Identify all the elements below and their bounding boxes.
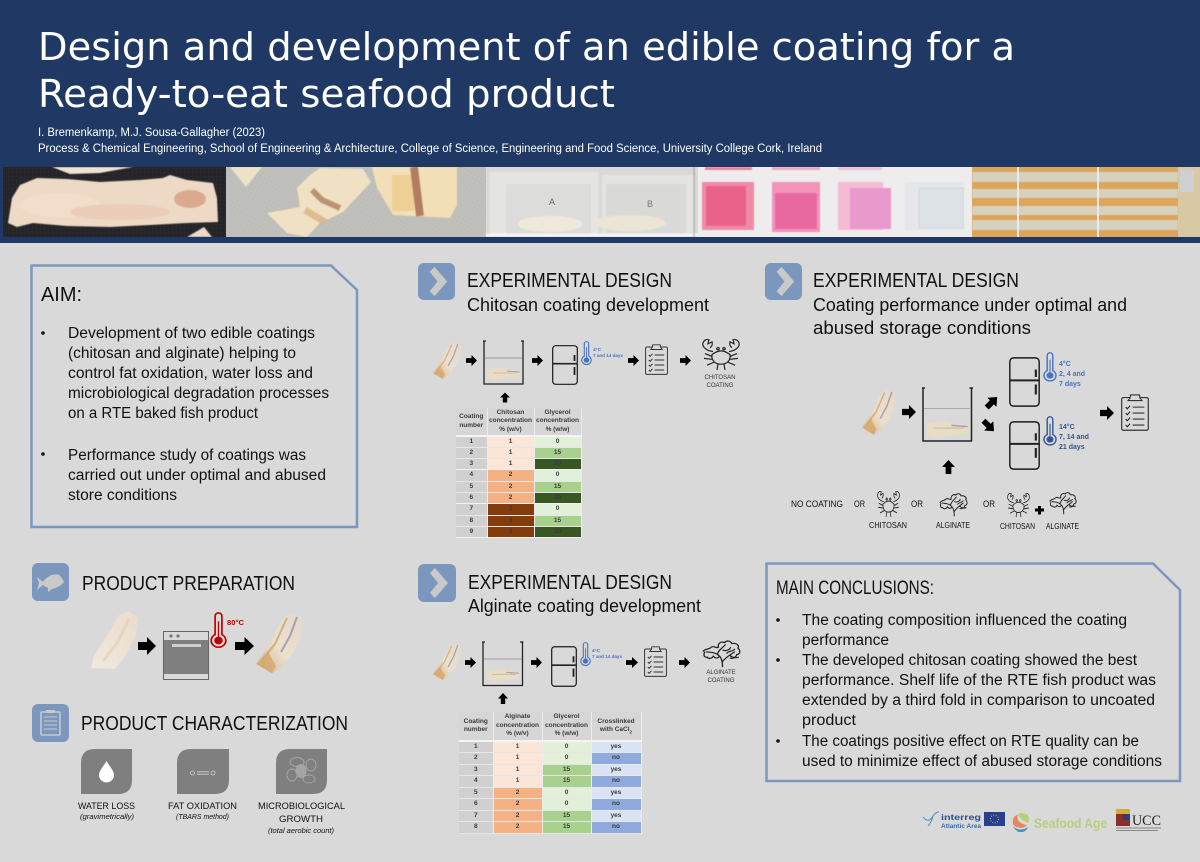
table: chitosan coating formulations: Chitosan xyxy=(497,409,524,416)
table: chitosan coating formulations: 30 xyxy=(554,460,561,467)
label: 80 degrees: 80°C xyxy=(227,618,245,627)
tile: microbiological growth: MICROBIOLOGICAL xyxy=(258,801,345,812)
image: baked fillet xyxy=(256,613,303,674)
table: alginate coating formulations: 0 xyxy=(565,800,568,807)
text: conclusions bullets xyxy=(776,612,1162,770)
logo: UCC xyxy=(1116,809,1161,830)
table: alginate coating formulations: Crosslinked xyxy=(597,718,635,725)
text: aim bullets: Development of two edible coatings xyxy=(68,325,315,342)
table: chitosan coating formulations: 7 xyxy=(469,505,473,512)
table: alginate coating formulations: 1 xyxy=(516,766,519,773)
panel: alginate coating development xyxy=(418,564,740,704)
process flow: storage: 4°C xyxy=(1059,360,1071,368)
coating options row: OR xyxy=(983,499,995,509)
photo: packaged samples xyxy=(972,167,1200,237)
text: conclusions bullets: performance xyxy=(802,632,889,649)
tile: water loss: WATER LOSS xyxy=(78,801,135,812)
table: alginate coating formulations: no xyxy=(612,777,620,784)
table: chitosan coating formulations: 15 xyxy=(554,517,561,524)
title: Ready-to-eat seafood product xyxy=(38,72,615,116)
table: chitosan coating formulations: concentration xyxy=(489,417,532,424)
text: aim bullets: (chitosan and alginate) helping to xyxy=(68,345,296,362)
text: conclusions bullets: The coatings positive effect on RTE quality can be xyxy=(802,733,1139,750)
table: chitosan coating formulations: 30 xyxy=(554,528,561,535)
table: alginate coating formulations: 2 xyxy=(516,800,519,807)
logo: Seafood Age: Seafood Age xyxy=(1034,815,1107,831)
authors and affiliation: I. Bremenkamp, M.J. Sousa-Gallagher (2023) xyxy=(38,127,265,139)
table: chitosan coating formulations: 3 xyxy=(509,505,512,512)
coating options row: CHITOSAN xyxy=(1000,522,1035,531)
table: alginate coating formulations: 15 xyxy=(563,812,570,819)
table: alginate coating formulations: 15 xyxy=(563,766,570,773)
process flow: chitosan: 7 and 14 days xyxy=(593,353,623,359)
text: conclusions bullets: performance. Shelf life of the RTE fish product was xyxy=(802,672,1156,689)
coating options row: NO COATING xyxy=(791,499,843,509)
heading: chitosan design: Chitosan coating development xyxy=(467,295,709,315)
photo: pink films xyxy=(698,167,972,237)
table: alginate coating formulations: % (w/v) xyxy=(506,730,529,737)
table: alginate coating formulations: 1 xyxy=(516,777,519,784)
heading: alginate design: Alginate coating development xyxy=(468,596,701,616)
table: chitosan coating formulations: 0 xyxy=(556,505,559,512)
text: aim bullets: store conditions xyxy=(68,487,177,504)
table: chitosan coating formulations: 0 xyxy=(556,438,559,445)
table: alginate coating formulations: 6 xyxy=(474,800,478,807)
table: alginate coating formulations: 2 xyxy=(516,789,519,796)
table: alginate coating formulations: 15 xyxy=(563,823,570,830)
icon: chevron xyxy=(418,263,455,300)
coating options row: OR xyxy=(911,499,923,509)
table: chitosan coating formulations: % (w/w) xyxy=(546,426,569,433)
table: chitosan coating formulations: 30 xyxy=(554,494,561,501)
photo strip xyxy=(3,167,1200,237)
arrow xyxy=(235,637,254,655)
table: chitosan coating formulations: 2 xyxy=(509,494,512,501)
table: alginate coating formulations: no xyxy=(612,823,620,830)
table: alginate coating formulations: no xyxy=(612,800,620,807)
icon: chevron xyxy=(765,263,802,300)
table: alginate coating formulations: 2 xyxy=(516,823,519,830)
process flow: chitosan: 4°C xyxy=(593,347,602,353)
table: alginate coating formulations: 0 xyxy=(565,743,568,750)
heading: product preparation: PRODUCT PREPARATION xyxy=(82,573,295,595)
table: chitosan coating formulations: concentration xyxy=(536,417,579,424)
header banner xyxy=(0,0,1200,243)
table: chitosan coating formulations: 2 xyxy=(509,471,512,478)
logo: Seafood Age xyxy=(1013,813,1107,832)
text: aim bullets: on a RTE baked fish product xyxy=(68,405,259,422)
tile: fat oxidation xyxy=(168,749,237,821)
text: conclusions bullets: extended by a third fold in comparison to uncoated xyxy=(802,692,1155,709)
text: aim bullets xyxy=(41,325,329,504)
title: Design and development of an edible coating for a xyxy=(38,25,1015,69)
tile: fat oxidation: FAT OXIDATION xyxy=(168,801,237,812)
table: alginate coating formulations: with CaCl2 xyxy=(600,726,632,734)
table: alginate coating formulations: concentration xyxy=(496,722,539,729)
table: chitosan coating formulations: 15 xyxy=(554,483,561,490)
table: alginate coating formulations: 1 xyxy=(516,754,519,761)
logo: Interreg Atlantic Area: Atlantic Area xyxy=(941,824,982,830)
process flow: storage xyxy=(862,353,1148,474)
tile: water loss: (gravimetrically) xyxy=(80,814,134,821)
process flow: alginate: COATING xyxy=(708,678,735,684)
table: chitosan coating formulations: number xyxy=(459,422,483,428)
icon: clipboard xyxy=(32,704,69,742)
text: conclusions bullets: The developed chitosan coating showed the best xyxy=(802,652,1138,669)
table: alginate coating formulations: yes xyxy=(611,766,621,773)
table: chitosan coating formulations: 15 xyxy=(554,449,561,456)
heading: alginate design xyxy=(468,572,701,616)
table: chitosan coating formulations: 1 xyxy=(469,438,473,445)
photo: storage containers: A xyxy=(549,197,555,207)
text: conclusions bullets: product xyxy=(802,712,857,729)
table: chitosan coating formulations: 1 xyxy=(509,460,512,467)
table: alginate coating formulations: Alginate xyxy=(505,713,530,720)
table: chitosan coating formulations xyxy=(456,408,582,538)
heading: chitosan design xyxy=(467,270,709,315)
table: chitosan coating formulations: 3 xyxy=(469,460,473,467)
panel: product preparation xyxy=(32,563,303,680)
table: chitosan coating formulations: % (w/v) xyxy=(499,426,522,433)
arrow xyxy=(138,637,156,655)
process flow: storage: 7, 14 and xyxy=(1059,434,1089,441)
panel: aim xyxy=(32,266,357,527)
process flow: storage: 7 days xyxy=(1059,381,1081,388)
photo: storage containers xyxy=(486,167,698,237)
coating options row: ALGINATE xyxy=(1046,522,1079,531)
heading: conclusions: MAIN CONCLUSIONS: xyxy=(776,578,934,599)
process flow: alginate: 7 and 14 days xyxy=(592,654,622,660)
icon: fish xyxy=(32,563,69,601)
heading: storage design: EXPERIMENTAL DESIGN xyxy=(813,270,1019,292)
table: chitosan coating formulations: 0 xyxy=(556,471,559,478)
process flow: chitosan: CHITOSAN xyxy=(705,375,735,381)
table: alginate coating formulations: concentration xyxy=(545,722,588,729)
process flow: chitosan xyxy=(433,339,739,402)
process flow: storage: 21 days xyxy=(1059,444,1085,451)
icon: red thermometer xyxy=(211,613,226,647)
tile: microbiological growth: GROWTH xyxy=(279,814,323,825)
text: aim bullets: Performance study of coatings was xyxy=(68,447,306,464)
process flow: storage: 14°C xyxy=(1059,423,1075,431)
table: chitosan coating formulations: 2 xyxy=(469,449,473,456)
coating options row xyxy=(791,491,1079,531)
logo: Interreg Atlantic Area: interreg xyxy=(941,813,981,822)
table: alginate coating formulations: 3 xyxy=(474,766,478,773)
heading: alginate design: EXPERIMENTAL DESIGN xyxy=(468,572,672,594)
table: alginate coating formulations: 5 xyxy=(474,789,478,796)
table: chitosan coating formulations: 4 xyxy=(469,471,473,478)
photo: fish pieces on grey mesh xyxy=(226,167,486,237)
icon: oven xyxy=(164,632,208,680)
panel: product characterization xyxy=(32,704,348,835)
heading: storage design xyxy=(813,270,1127,338)
table: alginate coating formulations: Coating xyxy=(464,718,488,725)
table: chitosan coating formulations: 1 xyxy=(509,438,512,445)
table: alginate coating formulations: 7 xyxy=(474,812,478,819)
table: alginate coating formulations: 2 xyxy=(474,754,478,761)
table: alginate coating formulations: number xyxy=(464,726,488,733)
table: chitosan coating formulations: Glycerol xyxy=(544,409,570,416)
heading: chitosan design: EXPERIMENTAL DESIGN xyxy=(467,270,672,292)
table: chitosan coating formulations: 3 xyxy=(509,517,512,524)
process flow: alginate: ALGINATE xyxy=(706,670,736,676)
photo: storage containers: B xyxy=(647,199,653,209)
title xyxy=(38,25,1015,116)
tile: water loss xyxy=(78,749,135,821)
table: alginate coating formulations: 15 xyxy=(563,777,570,784)
process flow: alginate xyxy=(433,641,740,704)
table: chitosan coating formulations: 5 xyxy=(469,483,473,490)
table: alginate coating formulations: yes xyxy=(611,812,621,819)
table: alginate coating formulations: no xyxy=(612,754,620,761)
logo: UCC: UCC xyxy=(1132,813,1161,829)
coating options row: CHITOSAN xyxy=(869,521,907,530)
table: alginate coating formulations: 1 xyxy=(516,743,519,750)
text: aim bullets: microbiological degradation processes xyxy=(68,385,329,402)
table: chitosan coating formulations: 6 xyxy=(469,494,473,501)
heading: storage design: Coating performance under optimal and xyxy=(813,295,1127,315)
table: alginate coating formulations xyxy=(459,712,642,834)
table: chitosan coating formulations: Coating xyxy=(459,413,483,420)
text: aim bullets: carried out under optimal and abused xyxy=(68,467,326,484)
image: raw fillet xyxy=(91,611,138,669)
table: alginate coating formulations: 2 xyxy=(516,812,519,819)
table: alginate coating formulations: 0 xyxy=(565,789,568,796)
table: alginate coating formulations: % (w/w) xyxy=(555,730,578,737)
panel: main conclusions xyxy=(766,564,1180,781)
table: alginate coating formulations: 0 xyxy=(565,754,568,761)
table: alginate coating formulations: 8 xyxy=(474,823,478,830)
process flow: alginate: 4°C xyxy=(592,648,601,654)
table: alginate coating formulations: yes xyxy=(611,789,621,796)
panel: storage performance design xyxy=(765,263,1148,531)
table: chitosan coating formulations: 9 xyxy=(469,528,473,535)
table: alginate coating formulations: 1 xyxy=(474,743,478,750)
tile: microbiological growth xyxy=(258,749,345,835)
heading: aim: AIM: xyxy=(41,284,82,306)
coating options row: ALGINATE xyxy=(936,521,970,530)
photo: raw fillet on mesh xyxy=(3,167,226,237)
icon: chevron xyxy=(418,564,456,602)
panel: chitosan coating development xyxy=(418,263,739,402)
process flow: storage: 2, 4 and xyxy=(1059,371,1085,378)
coating options row: OR xyxy=(854,499,865,509)
text: aim bullets: control fat oxidation, water loss and xyxy=(68,365,313,382)
table: alginate coating formulations: yes xyxy=(611,743,621,750)
table: chitosan coating formulations: 3 xyxy=(509,528,512,535)
authors and affiliation xyxy=(38,127,822,155)
tile: microbiological growth: (total aerobic count) xyxy=(268,828,334,835)
tile: fat oxidation: (TBARS method) xyxy=(176,814,229,821)
table: alginate coating formulations: 4 xyxy=(474,777,478,784)
partner logos xyxy=(923,809,1161,832)
table: chitosan coating formulations: 8 xyxy=(469,517,473,524)
heading: storage design: abused storage conditions xyxy=(813,318,1031,338)
table: chitosan coating formulations: 1 xyxy=(509,449,512,456)
text: conclusions bullets: used to minimize effect of abused storage conditions xyxy=(802,753,1162,770)
process flow: chitosan: COATING xyxy=(707,383,734,389)
heading: product characterization: PRODUCT CHARACTERIZATION xyxy=(81,713,348,735)
text: conclusions bullets: The coating composition influenced the coating xyxy=(802,612,1127,629)
authors and affiliation: Process & Chemical Engineering, School of Engineering & Architecture, College of Science, Engineering and Food Science, University College Cork, Ireland xyxy=(38,143,822,155)
logo: Interreg Atlantic Area xyxy=(923,812,1005,830)
table: alginate coating formulations: Glycerol xyxy=(553,713,580,720)
table: chitosan coating formulations: 2 xyxy=(509,483,512,490)
